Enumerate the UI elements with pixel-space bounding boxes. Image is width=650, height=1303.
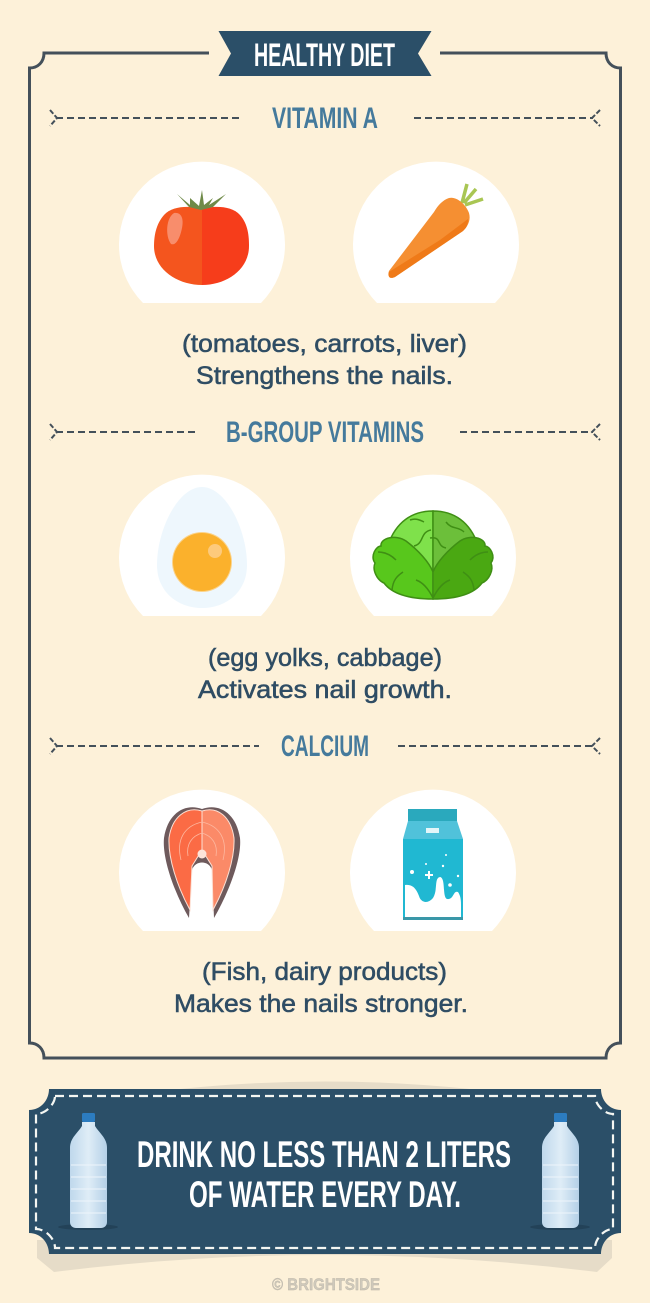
title ribbon — [218, 31, 432, 76]
caption: calcium foods: (Fish, dairy products) — [202, 958, 447, 986]
icon: carrot — [353, 162, 519, 303]
section heading: calcium: CALCIUM — [281, 730, 369, 763]
banner body — [29, 1089, 621, 1254]
icon: tomato — [119, 162, 285, 303]
caption: vitamin A foods — [182, 330, 467, 390]
caption: B-group foods — [198, 644, 452, 704]
section heading: B-group vitamins — [50, 416, 600, 449]
caption: calcium foods: Makes the nails stronger. — [174, 990, 468, 1018]
title ribbon: HEALTHY DIET — [254, 37, 395, 73]
icon: salmon steak — [119, 790, 285, 931]
icon: egg — [119, 475, 285, 616]
caption: B-group foods: Activates nail growth. — [198, 676, 452, 704]
caption: vitamin A foods: Strengthens the nails. — [196, 362, 453, 390]
panel: healthy diet frame — [30, 53, 620, 1058]
watermark: brightside: © BRIGHTSIDE — [272, 1275, 380, 1294]
icon: cabbage — [350, 475, 516, 616]
banner text — [137, 1134, 511, 1215]
icon: right water bottle — [530, 1113, 590, 1230]
section heading: vitamin A — [50, 102, 600, 135]
icon: left water bottle — [58, 1113, 118, 1230]
banner stitching — [36, 1096, 613, 1248]
callout: drink water banner — [29, 1082, 621, 1272]
caption: calcium foods — [174, 958, 468, 1018]
icon: milk carton — [350, 790, 516, 931]
banner shadow — [37, 1082, 612, 1272]
section heading: B-group vitamins: B-GROUP VITAMINS — [226, 416, 424, 449]
section heading: calcium — [50, 730, 600, 763]
caption: vitamin A foods: (tomatoes, carrots, liver) — [182, 330, 467, 358]
section heading: vitamin A: VITAMIN A — [272, 102, 378, 135]
banner text: OF WATER EVERY DAY. — [189, 1174, 461, 1215]
caption: B-group foods: (egg yolks, cabbage) — [208, 644, 442, 672]
